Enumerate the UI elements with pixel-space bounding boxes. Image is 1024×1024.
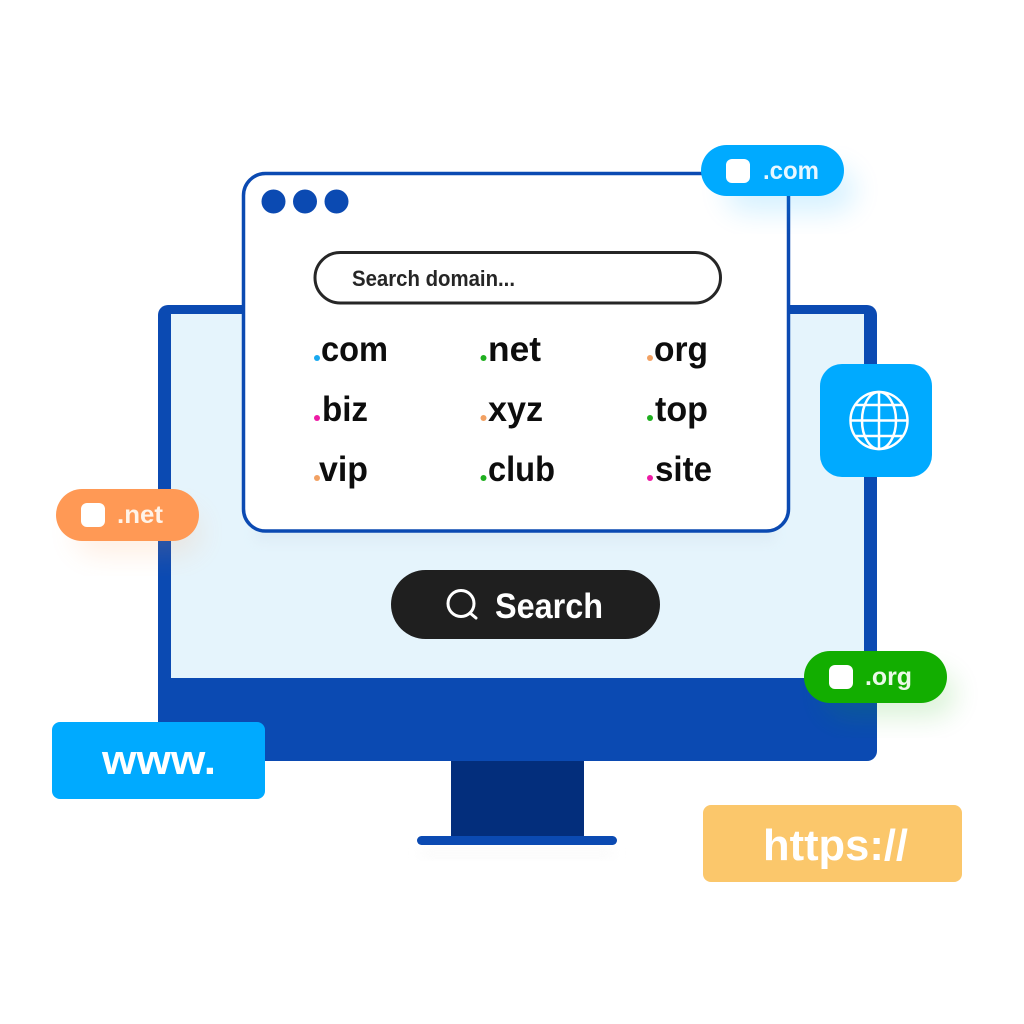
- domain list: [314, 330, 712, 489]
- domain .org: org: [654, 330, 708, 369]
- .net badge: [56, 489, 200, 554]
- .org badge: [804, 651, 955, 716]
- browser window: [244, 174, 788, 542]
- https label: [703, 805, 962, 882]
- domain .site: site: [655, 450, 712, 489]
- globe tile: [820, 364, 932, 477]
- search input: [315, 252, 720, 303]
- window shadow: [255, 522, 775, 542]
- .org badge: .org: [865, 663, 912, 691]
- monitor stand: [451, 760, 584, 837]
- monitor foot shadow: [420, 849, 614, 857]
- www label: [52, 722, 265, 799]
- domain .biz: biz: [322, 390, 368, 429]
- domain .net: net: [488, 330, 541, 369]
- domain .xyz: xyz: [488, 390, 543, 429]
- search input: Search domain...: [352, 266, 515, 291]
- .com badge: [701, 145, 855, 212]
- domain .vip: vip: [319, 450, 368, 489]
- monitor: [158, 305, 877, 857]
- icon: globe: [850, 392, 908, 449]
- icon: magnifier: [448, 590, 476, 618]
- monitor body: [158, 305, 877, 761]
- search button: Search: [495, 587, 603, 626]
- .com badge: .com: [763, 157, 819, 185]
- domain .top: top: [655, 390, 708, 429]
- .net badge: .net: [117, 501, 164, 529]
- window control dots: [262, 190, 348, 214]
- domain .com: com: [321, 330, 388, 369]
- www label: www.: [101, 736, 216, 783]
- monitor foot: [417, 836, 617, 845]
- search button: [391, 570, 660, 639]
- domain .club: club: [488, 450, 555, 489]
- window frame: [244, 174, 788, 531]
- monitor screen: [171, 314, 864, 678]
- https label: https://: [763, 821, 908, 870]
